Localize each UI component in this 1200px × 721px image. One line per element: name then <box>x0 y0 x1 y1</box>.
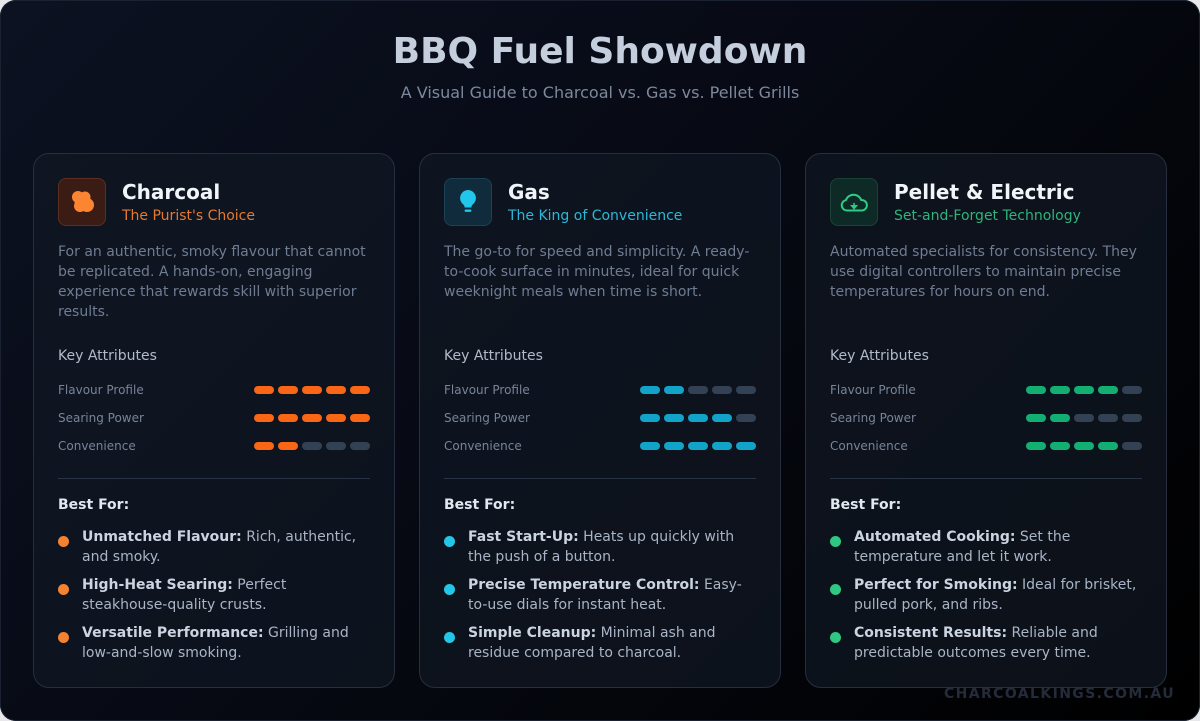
heading: charcoal: Charcoal <box>122 180 220 204</box>
list item <box>444 529 734 565</box>
heading: key attributes: Key Attributes <box>58 348 157 364</box>
list item: residue compared to charcoal. <box>468 645 681 661</box>
attribute: convenience: Convenience <box>444 439 522 453</box>
list item: Unmatched Flavour: Rich, authentic, <box>82 529 356 545</box>
icon: charcoal <box>58 178 106 226</box>
attribute: flavour profile: Flavour Profile <box>58 383 144 397</box>
list item: Fast Start-Up: Heats up quickly with <box>468 529 734 545</box>
list item <box>830 625 1098 661</box>
list item: Versatile Performance: Grilling and <box>82 625 349 641</box>
list item <box>444 577 742 613</box>
list item <box>58 577 286 613</box>
attribute: searing power <box>58 411 370 425</box>
tagline: Set-and-Forget Technology <box>894 208 1081 224</box>
attribute: convenience <box>830 439 1142 453</box>
list item: Automated Cooking: Set the <box>854 529 1070 545</box>
panel: gas <box>419 153 781 688</box>
attribute: searing power <box>830 411 1142 425</box>
list item: Precise Temperature Control: Easy- <box>468 577 742 593</box>
description: be replicated. A hands-on, engaging <box>58 264 313 280</box>
subtitle: A Visual Guide to Charcoal vs. Gas vs. Pellet Grills <box>401 83 799 102</box>
panel: charcoal <box>33 153 395 688</box>
attribute: searing power: Searing Power <box>444 411 530 425</box>
heading: best for: Best For: <box>58 497 129 513</box>
attribute: flavour profile <box>444 383 756 397</box>
list item: High-Heat Searing: Perfect <box>82 577 286 593</box>
heading: gas: Gas <box>508 180 550 204</box>
list item <box>58 625 349 661</box>
list item: Simple Cleanup: Minimal ash and <box>468 625 716 641</box>
description <box>830 244 1137 300</box>
list item: Perfect for Smoking: Ideal for brisket, <box>854 577 1136 593</box>
list item: predictable outcomes every time. <box>854 645 1091 661</box>
description: to-cook surface in minutes, ideal for quick <box>444 264 739 280</box>
list item: and smoky. <box>82 549 161 565</box>
description: experience that rewards skill with superior <box>58 284 356 300</box>
attribute: flavour profile: Flavour Profile <box>830 383 916 397</box>
attribute: flavour profile <box>58 383 370 397</box>
description: For an authentic, smoky flavour that cannot <box>58 244 366 260</box>
list item <box>830 577 1136 613</box>
tagline: The Purist's Choice <box>122 208 255 224</box>
title: BBQ Fuel Showdown <box>393 31 807 72</box>
attribute: searing power: Searing Power <box>58 411 144 425</box>
list item: temperature and let it work. <box>854 549 1052 565</box>
panel: pellet and electric <box>805 153 1167 688</box>
icon: cloud <box>830 178 878 226</box>
description: weeknight meals when time is short. <box>444 284 702 300</box>
list item <box>830 529 1070 565</box>
list item: to-use dials for instant heat. <box>468 597 666 613</box>
description: Automated specialists for consistency. They <box>830 244 1137 260</box>
attribute: flavour profile <box>830 383 1142 397</box>
attribute: convenience <box>444 439 756 453</box>
attribute: searing power: Searing Power <box>830 411 916 425</box>
attribute: flavour profile: Flavour Profile <box>444 383 530 397</box>
heading: pellet and electric: Pellet & Electric <box>894 180 1074 204</box>
heading: best for: Best For: <box>830 497 901 513</box>
attribute: convenience: Convenience <box>58 439 136 453</box>
attribute: searing power <box>444 411 756 425</box>
list item <box>444 625 716 661</box>
watermark: CHARCOALKINGS.COM.AU <box>944 686 1175 702</box>
description <box>444 244 749 300</box>
list item: steakhouse-quality crusts. <box>82 597 267 613</box>
description: use digital controllers to maintain precise <box>830 264 1121 280</box>
list item: the push of a button. <box>468 549 615 565</box>
list item: low-and-slow smoking. <box>82 645 242 661</box>
icon: gas bulb <box>444 178 492 226</box>
heading: key attributes: Key Attributes <box>830 348 929 364</box>
description: temperatures for hours on end. <box>830 284 1050 300</box>
attribute: convenience: Convenience <box>830 439 908 453</box>
description: The go-to for speed and simplicity. A ready- <box>444 244 749 260</box>
heading: best for: Best For: <box>444 497 515 513</box>
description: results. <box>58 304 109 320</box>
list item: pulled pork, and ribs. <box>854 597 1003 613</box>
description <box>58 244 366 320</box>
list item <box>58 529 356 565</box>
list item: Consistent Results: Reliable and <box>854 625 1098 641</box>
attribute: convenience <box>58 439 370 453</box>
heading: key attributes: Key Attributes <box>444 348 543 364</box>
tagline: The King of Convenience <box>508 208 682 224</box>
